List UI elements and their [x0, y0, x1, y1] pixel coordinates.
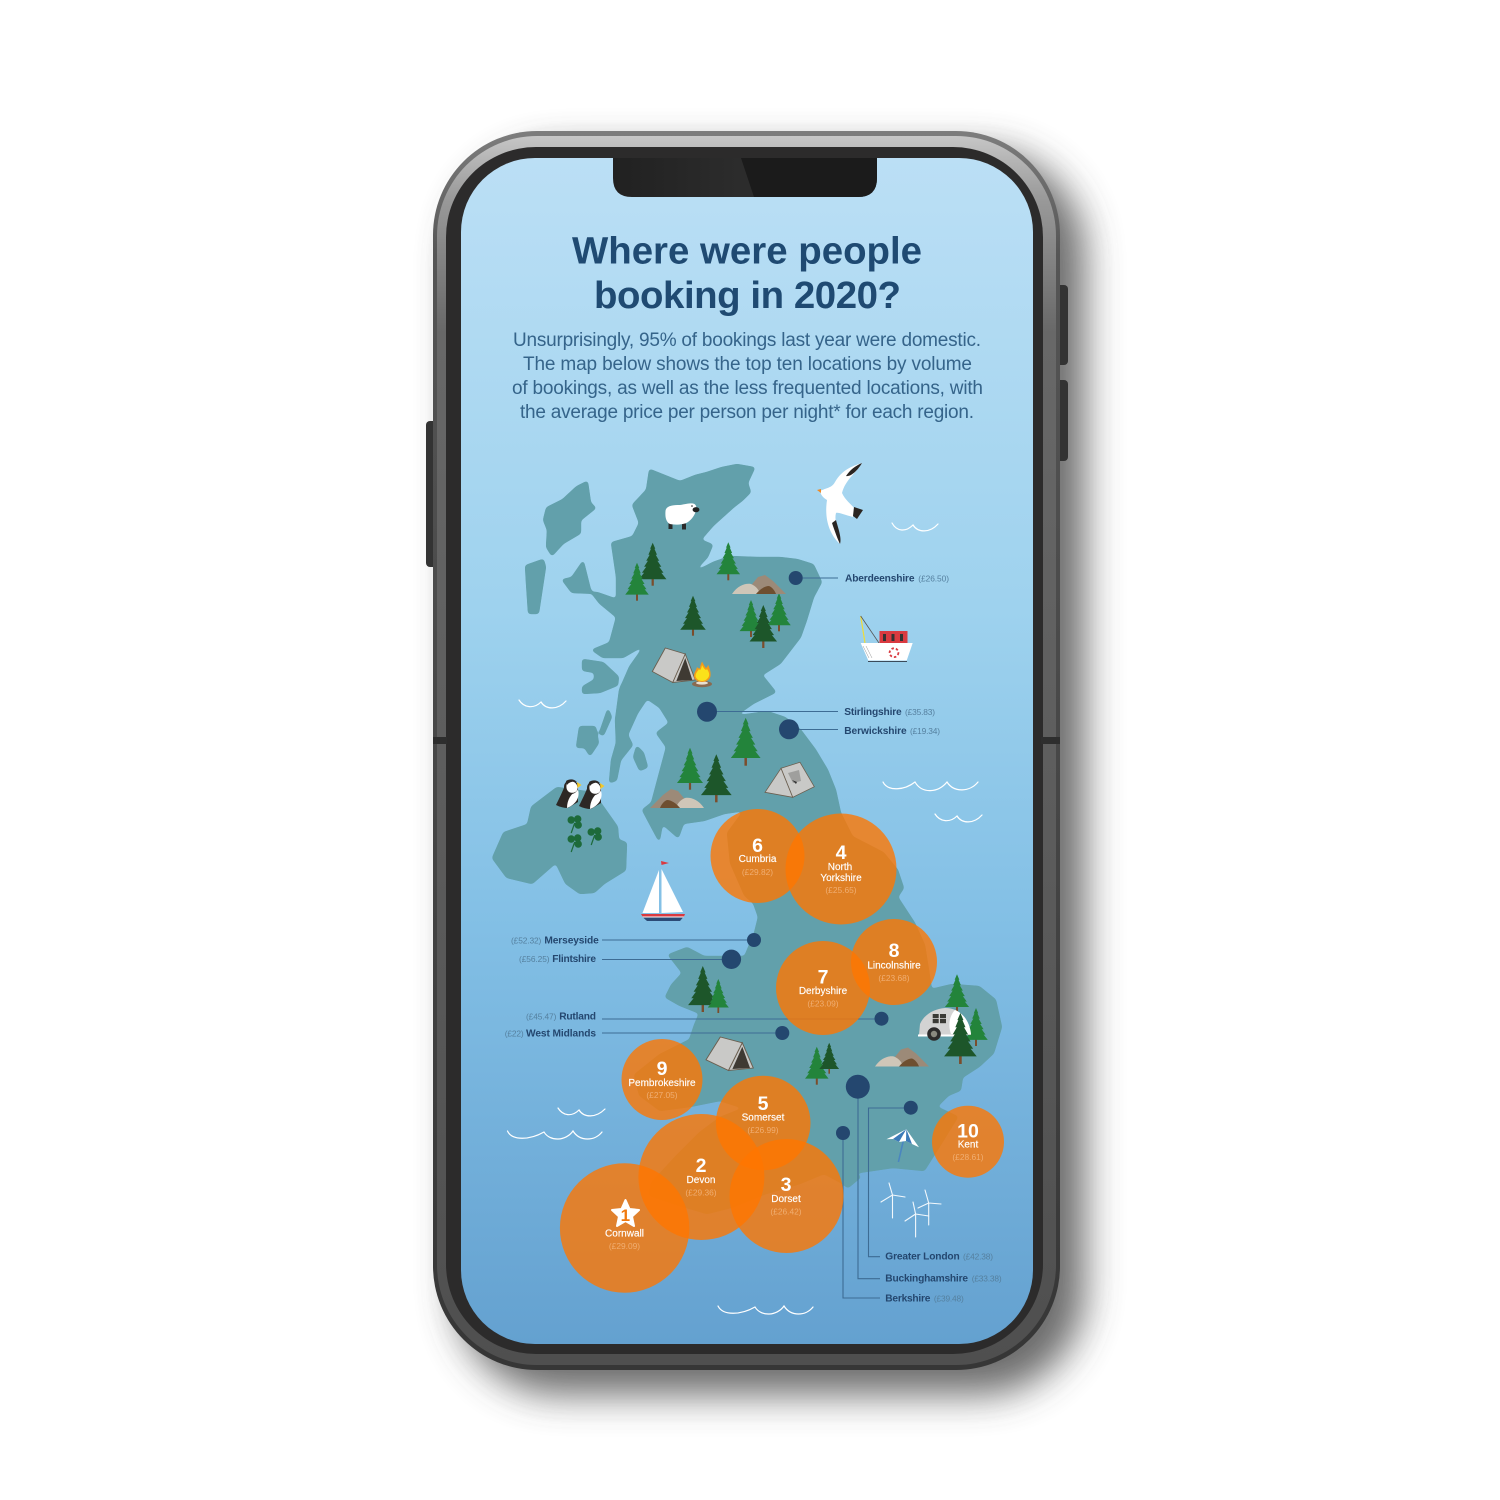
- Islay: [577, 727, 598, 755]
- Kintyre: [610, 725, 632, 782]
- icon: rocks: [650, 575, 929, 1066]
- left side button: [426, 421, 438, 567]
- Great Britain mainland: [563, 465, 1001, 1213]
- bubble: Devon: [638, 1114, 764, 1240]
- text: Kent: Kent: [958, 1140, 979, 1151]
- label: West Midlands: (£22): [505, 1028, 524, 1038]
- label: Berkshire: [885, 1294, 964, 1305]
- screen: [461, 158, 1033, 1344]
- intro text: The map below shows the top ten locations by volume: [523, 354, 972, 375]
- Jura: [600, 710, 611, 735]
- label: Rutland: [526, 1012, 596, 1023]
- text: Dorset: Dorset: [771, 1194, 801, 1205]
- title: booking in 2020?: [594, 274, 901, 317]
- icon: sailboat: [641, 861, 685, 921]
- text: Derbyshire: Derbyshire: [799, 986, 848, 997]
- bubble: Dorset: [730, 1139, 844, 1253]
- right upper button: [1055, 285, 1068, 365]
- text: Cumbria: [739, 835, 777, 877]
- phone shadow: [455, 150, 1085, 1395]
- label: Berwickshire: (£19.34): [910, 726, 940, 736]
- bezel: [446, 147, 1043, 1354]
- text: Somerset: (£26.99): [747, 1125, 779, 1135]
- label: Greater London: (£42.38): [963, 1252, 993, 1262]
- right lower button: [1055, 380, 1068, 461]
- text: Cumbria: Cumbria: [739, 854, 777, 865]
- icon: beach umbrella: [886, 1129, 919, 1162]
- Mull: [583, 660, 618, 693]
- metal band: [437, 136, 1056, 1365]
- marker dots: [697, 571, 918, 1140]
- bubble: Lincolnshire: [851, 919, 937, 1005]
- icon: trees: [625, 542, 969, 1085]
- text: Kent: (£28.61): [952, 1152, 984, 1162]
- bubble: Kent: [932, 1106, 1004, 1178]
- title: [572, 230, 922, 317]
- Uist: [526, 560, 545, 613]
- label: Berkshire: (£39.48): [934, 1294, 964, 1304]
- text: Cumbria: 6: [752, 835, 763, 857]
- text: North Yorkshire: Yorkshire: [820, 873, 862, 884]
- label: Aberdeenshire: [845, 574, 949, 585]
- text: Cumbria: (£29.82): [742, 867, 773, 877]
- connector lines: [602, 578, 911, 1298]
- icon: seagull: [817, 463, 863, 544]
- label: Berwickshire: [844, 726, 940, 737]
- label: Rutland: (£45.47): [526, 1012, 557, 1022]
- icon: tent and campfire: [652, 648, 712, 687]
- text: North Yorkshire: (£25.65): [825, 885, 857, 895]
- text: Cornwall with star: Cornwall: [605, 1229, 644, 1240]
- Arran: [634, 747, 647, 770]
- text: Devon: 2: [696, 1155, 707, 1177]
- text: Pembrokeshire: 9: [657, 1058, 668, 1080]
- text: North Yorkshire: 4: [836, 842, 847, 864]
- text: Derbyshire: (£23.09): [807, 999, 839, 1009]
- label: Greater London: [885, 1252, 993, 1263]
- icon: puffins: [556, 779, 604, 809]
- label: Merseyside: (£52.32): [511, 935, 542, 945]
- text: Somerset: Somerset: [742, 1113, 785, 1124]
- label: West Midlands: West Midlands: [526, 1028, 596, 1039]
- text: Cornwall with star: (£29.09): [609, 1241, 640, 1251]
- text: Devon: (£29.36): [685, 1188, 717, 1198]
- icon: tent Wales: [706, 1037, 753, 1070]
- Northern Ireland: [493, 788, 626, 893]
- bubble: Cumbria: [710, 809, 804, 903]
- label: Flintshire: (£56.25): [519, 954, 550, 964]
- text: Pembrokeshire: [628, 1058, 696, 1100]
- waves: [508, 523, 982, 1314]
- label: Berwickshire: Berwickshire: [844, 726, 907, 737]
- text: North Yorkshire: North: [828, 862, 852, 873]
- bubble: North Yorkshire: [786, 814, 896, 924]
- antenna band right: [1041, 737, 1060, 744]
- text: Pembrokeshire: Pembrokeshire: [628, 1078, 696, 1089]
- text: Devon: Devon: [687, 1175, 715, 1186]
- text: North Yorkshire: [820, 842, 862, 895]
- text: Kent: [952, 1120, 984, 1162]
- bubble: Cornwall: [560, 1163, 689, 1293]
- antenna band left: [433, 737, 447, 744]
- icon: shamrocks: [568, 815, 602, 852]
- map of UK: [493, 465, 1001, 1213]
- text: Cornwall with star: [605, 1200, 644, 1251]
- text: Devon: [685, 1155, 717, 1198]
- text: Lincolnshire: [867, 940, 921, 983]
- bubble: Somerset: [716, 1076, 810, 1170]
- intro text: [512, 330, 983, 423]
- text: Derbyshire: [799, 966, 848, 1009]
- icon: tree by caravan: [944, 1013, 977, 1064]
- label: Rutland: Rutland: [559, 1012, 596, 1023]
- label: Merseyside: Merseyside: [544, 935, 599, 946]
- text: Dorset: [770, 1174, 802, 1217]
- label: Aberdeenshire: Aberdeenshire: [845, 574, 915, 585]
- label: Stirlingshire: (£35.83): [905, 707, 935, 717]
- text: Lincolnshire: 8: [889, 940, 900, 962]
- label: Aberdeenshire: (£26.50): [918, 574, 949, 584]
- intro text: the average price per person per night* for each region.: [520, 402, 974, 423]
- notch: [613, 158, 877, 197]
- phone body: [433, 131, 1060, 1370]
- text: Cornwall with star: 1: [621, 1206, 630, 1225]
- bubble: Pembrokeshire: [622, 1039, 702, 1120]
- icon: caravan: [918, 1008, 988, 1046]
- text: Lincolnshire: Lincolnshire: [867, 960, 921, 972]
- text: Derbyshire: 7: [818, 966, 828, 988]
- bubble: Derbyshire: [776, 941, 870, 1035]
- label: Flintshire: [519, 954, 596, 965]
- text: Dorset: (£26.42): [770, 1207, 802, 1217]
- notch reflection: [741, 158, 877, 197]
- label: Merseyside: [511, 935, 599, 946]
- icon: wind turbines: [881, 1183, 941, 1237]
- label: Stirlingshire: Stirlingshire: [844, 707, 902, 718]
- intro text: of bookings, as well as the less frequented locations, with: [512, 378, 983, 399]
- label: Buckinghamshire: Buckinghamshire: [885, 1274, 968, 1285]
- icon: tent right: [765, 762, 814, 797]
- label: Stirlingshire: [844, 707, 935, 718]
- icon: fishing boat: [861, 616, 913, 662]
- text: Somerset: [742, 1093, 785, 1135]
- label: Flintshire: Flintshire: [552, 954, 596, 965]
- phone frame: [426, 131, 1068, 1370]
- label: Buckinghamshire: (£33.38): [972, 1274, 1002, 1284]
- Lewis: [544, 482, 595, 555]
- title: Where were people: [572, 230, 922, 272]
- label: Berkshire: Berkshire: [885, 1294, 931, 1305]
- label: Greater London: Greater London: [885, 1252, 960, 1263]
- text: Dorset: 3: [781, 1174, 792, 1196]
- text: Lincolnshire: (£23.68): [878, 973, 910, 983]
- intro text: Unsurprisingly, 95% of bookings last year were domestic.: [513, 330, 981, 351]
- text: Somerset: 5: [758, 1093, 769, 1115]
- text: Kent: 10: [957, 1120, 979, 1142]
- text: Pembrokeshire: (£27.05): [646, 1090, 678, 1100]
- icon: sheep: [665, 503, 699, 530]
